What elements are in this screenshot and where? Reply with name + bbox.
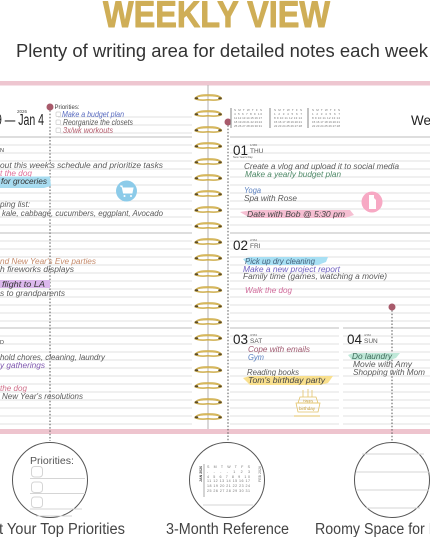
left page notes: the dog: [0, 384, 28, 393]
callout circle: 3-month reference: 4 5 6 7 8 9 10: [207, 475, 250, 479]
day 01: Yoga: [244, 186, 262, 195]
three-month calendars: 15 16 17 18 19 20 21: [274, 120, 302, 124]
day 04: Movie with Amy: [353, 360, 413, 369]
three-month calendars: 22 23 24 25 26 27 28: [312, 124, 340, 128]
priorities list: [54, 105, 133, 135]
day 01: New Year's Day: [233, 155, 253, 159]
planner spread: [0, 81, 430, 441]
callout circle: priorities: Priorities:: [30, 456, 74, 467]
three-month calendars: 4 5 6 7 8 9 10: [234, 112, 262, 116]
left page notes: s to grandparents: [0, 289, 65, 298]
three-month calendars: [231, 108, 340, 128]
priorities list: Priorities:: [54, 105, 80, 111]
day 03: Cope with emails: [248, 345, 310, 354]
day 03: Tom's birthday party: [248, 376, 326, 385]
day 03: 03: [233, 332, 248, 347]
day 03: Gym: [248, 353, 264, 362]
dotted callout line: calendar: [227, 122, 229, 441]
left page notes: for groceries: [1, 177, 47, 186]
day 03: 3/363: [250, 333, 257, 337]
subtitle: Plenty of writing area for detailed notes each week: [16, 40, 429, 61]
callout circle: 3-month reference: S M T W T F S: [207, 465, 251, 469]
three-month calendars: 1 2 3 4 5 6 7: [274, 112, 302, 116]
left page notes: t the dog: [0, 169, 33, 178]
day 01: Make a yearly budget plan: [245, 170, 342, 179]
left page notes: New Year's resolutions: [2, 392, 83, 401]
day 04: Do laundry: [352, 352, 393, 361]
three-month calendars: 8 9 10 11 12 13 14: [312, 116, 340, 120]
marker dot: calendar: [224, 118, 232, 126]
left page header date: 2026: [17, 109, 28, 114]
left page notes: h fireworks displays: [0, 265, 74, 274]
callout circle: 3-month reference: 25 26 27 28 29 30 31: [207, 489, 250, 493]
day 03: [233, 332, 333, 385]
marker dot: writing space: [388, 304, 396, 310]
icon: birthday cake: [294, 389, 320, 416]
callout circle: 3-month reference: 11 12 13 14 15 16 17: [207, 479, 250, 483]
day 01: 01: [233, 143, 248, 158]
priorities list: Reorganize the closets: [63, 118, 133, 127]
day dividers: [0, 137, 430, 328]
left page notes: flight to LA: [2, 280, 45, 289]
callout circle: 3-month reference: [190, 442, 264, 518]
left page notes: out this week's schedule and prioritize tasks: [0, 161, 163, 170]
left page notes: [0, 148, 164, 401]
day 04: Shopping with Mom: [353, 368, 425, 377]
three-month calendars: 18 19 20 21 22 23 24: [234, 120, 262, 124]
callout circle: priorities: [12, 442, 88, 518]
day 02: Make a new project report: [243, 265, 341, 274]
callout circle: 3-month reference: JAN 2026: [199, 466, 203, 482]
callout circle: 3-month reference: 18 19 20 21 22 23 24: [207, 484, 250, 488]
three-month calendars: 11 12 13 14 15 16 17: [234, 116, 262, 120]
spine: [207, 85, 209, 429]
three-month calendars: 25 26 27 28 29 30 31: [234, 124, 262, 128]
day 02: Family time (games, watching a movie): [243, 272, 387, 281]
icon: birthday cake: Happy: [303, 399, 313, 403]
day 04: SUN: [364, 338, 378, 345]
priorities list: 3x/wk workouts: [63, 126, 113, 135]
day 01: Create a vlog and upload it to social media: [244, 162, 400, 171]
day 01: THU: [250, 148, 264, 155]
binding rings: [194, 94, 222, 419]
three-month calendars: 15 16 17 18 19 20 21: [312, 120, 340, 124]
three-month calendars: 8 9 10 11 12 13 14: [274, 116, 302, 120]
day 01: [233, 143, 400, 219]
three-month calendars: S M T W T F S: [274, 108, 302, 112]
left page notes: nd New Year's Eve parties: [0, 257, 96, 266]
three-month calendars: S M T W T F S: [312, 108, 340, 112]
left page header date: [0, 109, 44, 129]
day 03: SAT: [250, 338, 262, 345]
day 02: [233, 238, 387, 295]
day 01: Spa with Rose: [244, 194, 298, 203]
top pink cover band: [0, 81, 430, 86]
day 03: Reading books: [247, 368, 299, 377]
day 01: 1/365: [250, 143, 257, 147]
callout circle: roomy space: [354, 442, 430, 518]
left page notes: D: [0, 340, 4, 346]
icon: drink: [362, 192, 382, 212]
dotted callout line: priorities: [49, 107, 51, 441]
day 02: FRI: [250, 243, 261, 250]
ruled lines: [0, 117, 430, 424]
bottom pink cover band: [0, 429, 430, 434]
marker dot: priorities: [46, 104, 54, 110]
three-month calendars: S M T W T F S: [234, 108, 262, 112]
day 02: Pick up dry cleaning: [245, 257, 316, 266]
icon: shopping cart: [116, 180, 137, 202]
day 02: Walk the dog: [245, 286, 293, 295]
left page notes: hold chores, cleaning, laundry: [0, 353, 106, 362]
day 04: 4/362: [364, 333, 371, 337]
priorities list: Make a budget plan: [62, 110, 124, 119]
icon: birthday cake: birthday: [299, 406, 316, 411]
day 02: 02: [233, 238, 248, 253]
dotted callout line: writing space: [391, 307, 393, 441]
day 04: 04: [347, 332, 363, 347]
callout circle: 3-month reference: FEB 2026: [258, 466, 262, 482]
left page notes: ping list:: [0, 200, 30, 209]
three-month calendars: 22 23 24 25 26 27 28: [274, 124, 302, 128]
day 02: 2/364: [250, 238, 257, 242]
left page notes: y gatherings: [0, 361, 45, 370]
day 01: Date with Bob @ 5:30 pm: [247, 210, 345, 219]
day 04: [347, 332, 425, 377]
callout circle: 3-month reference: - - - - 1 2 3: [207, 470, 250, 474]
left page notes: N: [0, 148, 4, 154]
left page notes: kale, cabbage, cucumbers, eggplant, Avocado: [2, 209, 164, 218]
three-month calendars: 1 2 3 4 5 6 7: [312, 112, 340, 116]
